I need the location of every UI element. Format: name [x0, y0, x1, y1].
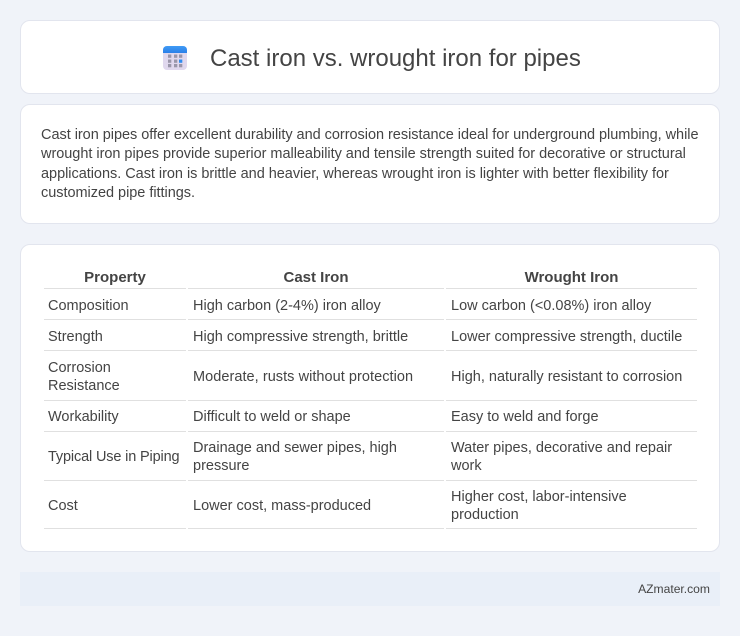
summary text [41, 127, 699, 201]
row: corrosion resistance: High, naturally resistant to corrosion [451, 369, 682, 385]
row: typical use in piping: work [451, 458, 482, 474]
row: workability [48, 409, 599, 425]
row: workability: Difficult to weld or shape [193, 409, 351, 425]
row: cost: Higher cost, labor-intensive [451, 489, 627, 505]
table header: Cast Iron [283, 269, 348, 286]
row: strength: Lower compressive strength, ductile [451, 329, 682, 345]
footer text: AZmater.com [638, 582, 710, 596]
row: typical use in piping: Drainage and sewer pipes, high [193, 440, 397, 456]
footer bar [20, 572, 720, 606]
row: typical use in piping [48, 440, 672, 474]
icon: calendar [163, 46, 187, 70]
table header: Property [84, 269, 146, 286]
row: strength [48, 329, 682, 345]
title panel [20, 20, 720, 94]
row: workability: Workability [48, 409, 119, 425]
row: cost: Cost [48, 498, 78, 514]
row: corrosion resistance: Resistance [48, 378, 120, 394]
summary panel [20, 104, 720, 224]
row: workability: Easy to weld and forge [451, 409, 599, 425]
summary text: wrought iron pipes provide superior malleability and tensile strength suited for decorative or structural [41, 146, 686, 162]
row: cost: production [451, 507, 519, 523]
table panel [20, 244, 720, 552]
row: corrosion resistance: Corrosion [48, 360, 111, 376]
table header: Wrought Iron [525, 269, 618, 286]
row: composition: High carbon (2-4%) iron alloy [193, 298, 381, 314]
row: corrosion resistance [48, 360, 682, 394]
row: strength: High compressive strength, brittle [193, 329, 408, 345]
row: cost [48, 489, 627, 523]
title: Cast iron vs. wrought iron for pipes [210, 45, 581, 72]
row: corrosion resistance: Moderate, rusts without protection [193, 369, 413, 385]
table header [84, 269, 618, 286]
row: strength: Strength [48, 329, 103, 345]
comparison table [44, 269, 697, 529]
row: typical use in piping: pressure [193, 458, 249, 474]
row: typical use in piping: Water pipes, decorative and repair [451, 440, 672, 456]
row: cost: Lower cost, mass-produced [193, 498, 371, 514]
row: composition: Low carbon (<0.08%) iron alloy [451, 298, 651, 314]
summary text: Cast iron pipes offer excellent durability and corrosion resistance ideal for underground plumbing, while [41, 127, 699, 143]
row: typical use in piping: Typical Use in Piping [48, 449, 179, 465]
row: composition [48, 298, 652, 314]
summary text: applications. Cast iron is brittle and heavier, whereas wrought iron is lighter with better flexibility for [41, 166, 669, 182]
row: composition: Composition [48, 298, 129, 314]
summary text: customized pipe fittings. [41, 185, 195, 201]
